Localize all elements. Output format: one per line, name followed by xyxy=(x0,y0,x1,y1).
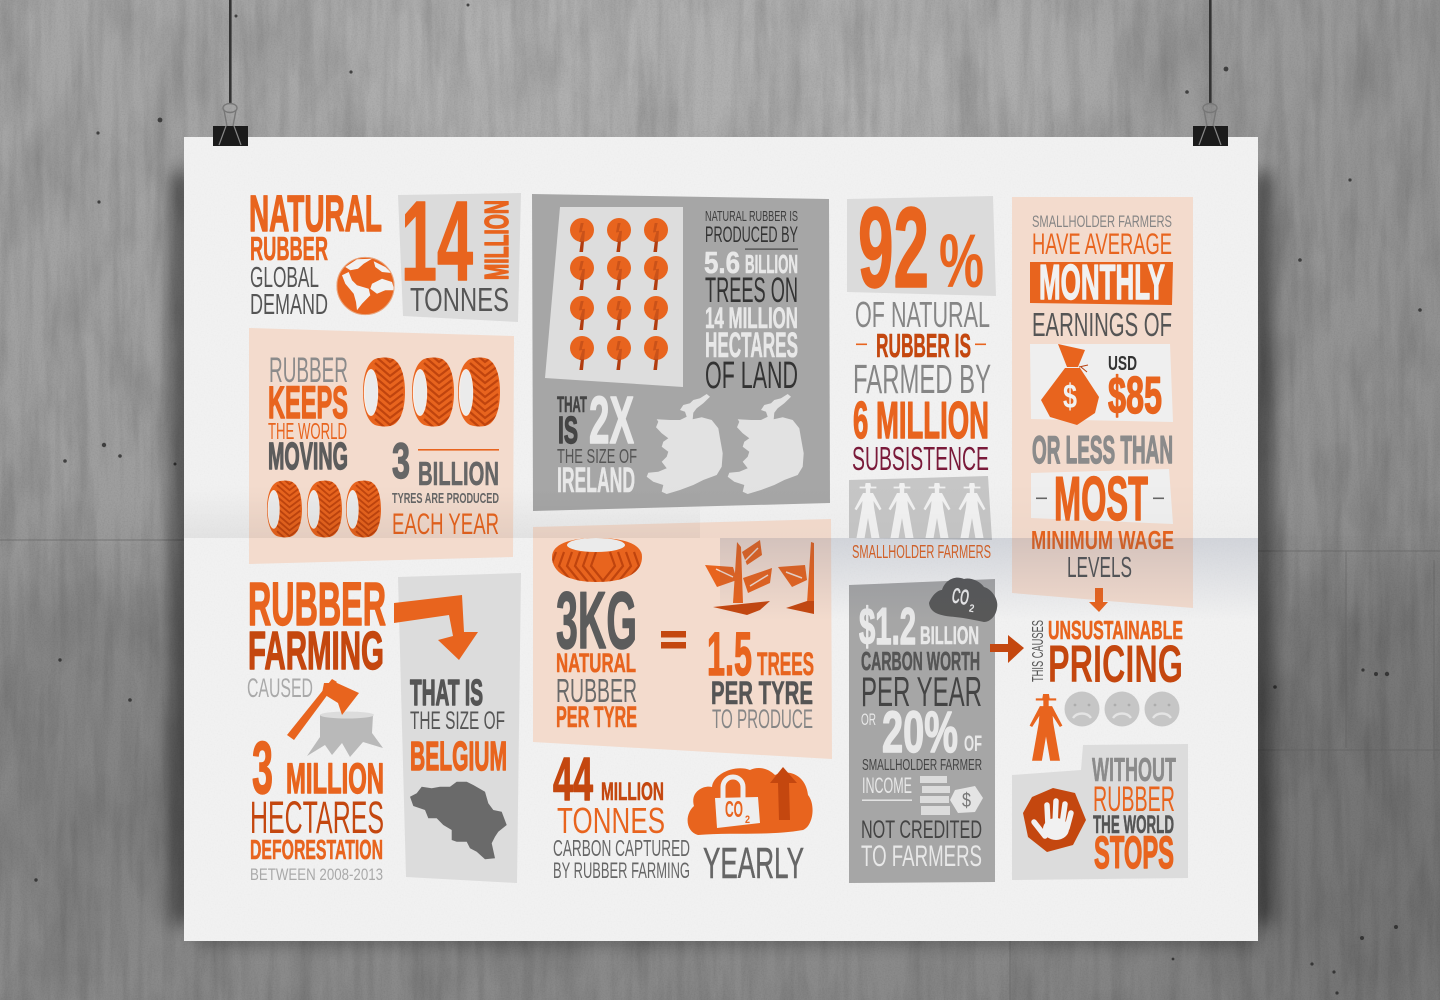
panel: natural rubber global demand xyxy=(249,178,521,322)
text: 3 million hectares deforestation: HECTARES xyxy=(250,792,384,843)
panel: unsustainable pricing xyxy=(1030,615,1183,761)
text: 44 million tonnes carbon captured: MILLION xyxy=(601,778,664,806)
text: produced by 5.6 billion trees xyxy=(704,208,798,397)
text: minimum wage levels xyxy=(1031,525,1174,584)
text: not credited to farmers xyxy=(861,816,982,873)
text: 1.5 trees per tyre to produce: 1.5 xyxy=(707,620,752,688)
map: ireland twice xyxy=(647,394,804,494)
label: million: MILLION xyxy=(478,200,515,280)
icon: axe and stump xyxy=(287,679,383,757)
heading: rubber farming caused: CAUSED xyxy=(247,673,313,703)
text: 1.2 billion carbon worth per year: $1.2 xyxy=(859,598,916,656)
text: 1.5 trees per tyre to produce: TO PRODUCE xyxy=(712,704,813,734)
text: rubber keeps the world moving: MOVING xyxy=(268,436,348,478)
text: that is the size of belgium: THE SIZE OF xyxy=(410,707,505,735)
text: of natural rubber is farmed by: FARMED BY xyxy=(853,356,991,402)
icons: tyres top row xyxy=(363,349,500,432)
icon: plants xyxy=(705,540,814,615)
heading: unsustainable: UNSUSTAINABLE xyxy=(1048,615,1183,645)
text: earnings of: EARNINGS OF xyxy=(1032,306,1172,343)
text: 1.5 trees per tyre to produce: PER TYRE xyxy=(711,675,813,711)
icon: flat tyre xyxy=(552,538,642,582)
text: without rubber the world stops: RUBBER xyxy=(1093,780,1175,819)
tree grid panel xyxy=(545,207,683,387)
heading: rubber farming caused: RUBBER xyxy=(248,570,386,638)
text: 3 billion tyres each year: EACH YEAR xyxy=(392,508,499,541)
poster sheet xyxy=(184,137,1258,941)
panel: 3kg per tyre equals 1.5 trees: 3KG xyxy=(556,576,637,666)
text: rubber keeps the world moving xyxy=(268,351,348,478)
icon: co2 cloud xyxy=(929,578,997,622)
heading: pricing: PRICING xyxy=(1048,635,1183,694)
icon: orange farmer xyxy=(1030,694,1062,761)
label: tonnes: TONNES xyxy=(410,282,509,319)
heading: natural rubber: NATURAL xyxy=(249,185,382,242)
text: rubber keeps the world moving: RUBBER xyxy=(269,351,348,390)
icon: co2 cloud: 2 xyxy=(968,603,975,615)
card: most: MOST xyxy=(1054,465,1148,534)
text: 3kg natural rubber per tyre: PER TYRE xyxy=(556,701,637,734)
text: 1.2 billion carbon worth per year: BILLION xyxy=(920,622,979,650)
arrow: down to pricing xyxy=(1089,588,1108,612)
text: 3 billion tyres each year xyxy=(392,433,499,541)
text: 44 million tonnes carbon captured: 44 xyxy=(553,745,593,813)
icon: stop hand xyxy=(1023,788,1086,852)
map: belgium xyxy=(410,782,507,859)
arrow: bent xyxy=(394,595,478,660)
banner: monthly xyxy=(1030,256,1173,310)
card: usd 85 money bag: $85 xyxy=(1108,367,1162,425)
text: 3 billion tyres each year: TYRES ARE PRODUCED xyxy=(392,490,499,507)
text: or 20 percent of smallholder farmer income: OF xyxy=(964,731,982,756)
panel: rubber farming deforestation xyxy=(247,570,386,884)
label: this causes: THIS CAUSES xyxy=(1030,620,1047,682)
text: that is 2x the size of ireland: THE SIZE OF xyxy=(557,446,637,468)
card: usd 85 money bag: $ xyxy=(1063,378,1077,416)
text: global demand xyxy=(250,262,328,321)
poster fold shading xyxy=(184,480,1258,620)
text: or 20 percent of smallholder farmer income xyxy=(861,700,982,801)
number: 14: 14 xyxy=(401,178,473,304)
text: 3 million hectares deforestation xyxy=(250,726,384,884)
panel: trees and land: HECTARES xyxy=(705,326,798,365)
text: 3 million hectares deforestation: 3 xyxy=(252,726,273,809)
icons: smallholder farmers xyxy=(849,476,992,540)
text: produced by 5.6 billion trees: OF LAND xyxy=(705,355,798,397)
text: rubber keeps the world moving: THE WORLD xyxy=(268,418,347,444)
text: minimum wage levels: LEVELS xyxy=(1067,552,1132,584)
icon: cloud with co2 lock and arrow: CO xyxy=(725,796,743,822)
text: that is 2x the size of ireland: IS xyxy=(558,410,578,452)
text: of natural rubber is farmed by xyxy=(852,294,991,477)
text: smallholder farmers have average: HAVE AVERAGE xyxy=(1032,228,1172,261)
panel: trees and land xyxy=(532,194,830,511)
text: global demand: GLOBAL xyxy=(250,262,319,294)
poster shadow xyxy=(170,172,1274,942)
text: or 20 percent of smallholder farmer income: 20% xyxy=(882,700,958,765)
panel: monthly earnings xyxy=(1012,197,1193,608)
text: 3 million hectares deforestation: DEFORESTATION xyxy=(250,834,383,865)
text: yearly: YEARLY xyxy=(703,839,804,888)
panel: 44 million tonnes carbon captured xyxy=(553,745,813,888)
text: or 20 percent of smallholder farmer income: INCOME xyxy=(862,773,912,798)
icon: money and coin bag xyxy=(920,776,983,815)
text: smallholder farmers have average xyxy=(1032,212,1172,261)
text: global demand: DEMAND xyxy=(250,289,328,321)
heading: rubber farming caused xyxy=(247,570,386,703)
icon: cloud with co2 lock and arrow: 2 xyxy=(745,814,750,826)
text: produced by 5.6 billion trees: TREES ON xyxy=(705,271,798,310)
panel: 92 percent: % xyxy=(939,219,984,304)
panel: size of belgium xyxy=(394,573,521,883)
text: without rubber the world stops xyxy=(1092,751,1176,878)
panel: 92 percent: 92 xyxy=(858,185,929,312)
text: not credited to farmers: TO FARMERS xyxy=(861,840,982,873)
icon: equals sign xyxy=(661,631,686,648)
text: 1.2 billion carbon worth per year xyxy=(859,598,982,715)
text: without rubber the world stops: WITHOUT xyxy=(1092,751,1176,788)
text: produced by 5.6 billion trees: NATURAL RUBBER IS xyxy=(705,208,798,225)
text: 1.5 trees per tyre to produce: TREES xyxy=(757,646,814,682)
text: of natural rubber is farmed by: SUBSISTENCE xyxy=(852,440,989,477)
heading: natural rubber xyxy=(249,185,382,267)
text: without rubber the world stops: STOPS xyxy=(1094,827,1174,878)
text: 1.5 trees per tyre to produce xyxy=(707,620,814,734)
text: 1.2 billion carbon worth per year: PER YEAR xyxy=(861,668,982,715)
text: that is 2x the size of ireland: IRELAND xyxy=(557,461,635,500)
panel: 14 million tonnes xyxy=(398,178,521,322)
text: smallholder farmers have average: SMALLHOLDER FARMERS xyxy=(1032,212,1172,231)
text: produced by 5.6 billion trees: BILLION xyxy=(745,249,798,279)
text: 3kg natural rubber per tyre xyxy=(556,576,637,734)
card: usd 85 money bag: USD xyxy=(1108,353,1137,375)
panel: 3kg per tyre equals 1.5 trees xyxy=(533,519,832,759)
panel: 92 percent farmed by smallholders xyxy=(847,185,996,562)
left binder clip and wire xyxy=(213,0,248,146)
text: or 20 percent of smallholder farmer income: OR xyxy=(861,710,876,729)
text: of natural rubber is farmed by: RUBBER IS xyxy=(876,327,971,364)
text: 44 million tonnes carbon captured: BY RUBBER FARMING xyxy=(553,858,690,883)
text: of natural rubber is farmed by: OF NATURAL xyxy=(855,294,990,335)
text: that is 2x the size of ireland xyxy=(557,383,637,500)
icons: tyres bottom row xyxy=(267,474,381,542)
text: 3 billion tyres each year: 3 xyxy=(392,433,410,489)
card: usd 85 money bag xyxy=(1030,344,1173,425)
right binder clip and wire xyxy=(1193,0,1228,146)
panel: monthly earnings: OR LESS THAN xyxy=(1032,429,1173,472)
text: 3kg natural rubber per tyre: NATURAL xyxy=(556,648,636,678)
text: produced by 5.6 billion trees: 14 MILLION xyxy=(705,302,798,335)
text: 3 million hectares deforestation: MILLION xyxy=(286,755,384,803)
panel: rubber keeps the world moving xyxy=(249,328,514,564)
text: 44 million tonnes carbon captured xyxy=(553,745,690,883)
text: of natural rubber is farmed by: 6 MILLION xyxy=(853,392,989,450)
text: that is the size of belgium: BELGIUM xyxy=(410,733,507,779)
arrow: carbon to pricing xyxy=(990,635,1024,663)
panel: without rubber the world stops xyxy=(1012,744,1188,880)
text: that is 2x the size of ireland: 2X xyxy=(589,383,634,458)
text: that is 2x the size of ireland: THAT xyxy=(557,392,587,417)
icon: co2 cloud: CO xyxy=(950,583,971,610)
text: 44 million tonnes carbon captured: CARBON CAPTURED xyxy=(553,835,690,861)
text: not credited to farmers: NOT CREDITED xyxy=(861,816,982,844)
text: 44 million tonnes carbon captured: TONNES xyxy=(557,801,665,841)
text: 3 million hectares deforestation: BETWEEN 2008-2013 xyxy=(250,865,383,884)
text: without rubber the world stops: THE WORLD xyxy=(1093,811,1174,839)
icon: money and coin bag: $ xyxy=(962,790,971,812)
text: rubber keeps the world moving: KEEPS xyxy=(268,377,348,428)
text: that is the size of belgium xyxy=(410,672,507,779)
text: produced by 5.6 billion trees: PRODUCED BY xyxy=(705,222,798,247)
text: minimum wage levels: MINIMUM WAGE xyxy=(1031,525,1174,555)
text: 3kg natural rubber per tyre: RUBBER xyxy=(556,672,637,709)
icons: sad faces xyxy=(1064,692,1180,726)
text: 1.2 billion carbon worth per year: CARBON WORTH xyxy=(861,646,980,676)
icon: globe xyxy=(336,257,394,315)
icon: cloud with co2 lock and arrow xyxy=(688,767,813,835)
label: smallholder farmers: SMALLHOLDER FARMERS xyxy=(852,542,991,562)
heading: rubber farming caused: FARMING xyxy=(248,621,384,681)
card: most xyxy=(1031,465,1173,534)
banner: monthly: MONTHLY xyxy=(1039,256,1165,310)
text: 3 billion tyres each year: BILLION xyxy=(418,455,499,492)
panel: carbon worth xyxy=(849,578,997,883)
heading: natural rubber: RUBBER xyxy=(250,230,328,267)
text: that is the size of belgium: THAT IS xyxy=(410,672,483,713)
text: or 20 percent of smallholder farmer income: SMALLHOLDER FARMER xyxy=(862,757,982,774)
text: produced by 5.6 billion trees: 5.6 xyxy=(704,245,740,280)
